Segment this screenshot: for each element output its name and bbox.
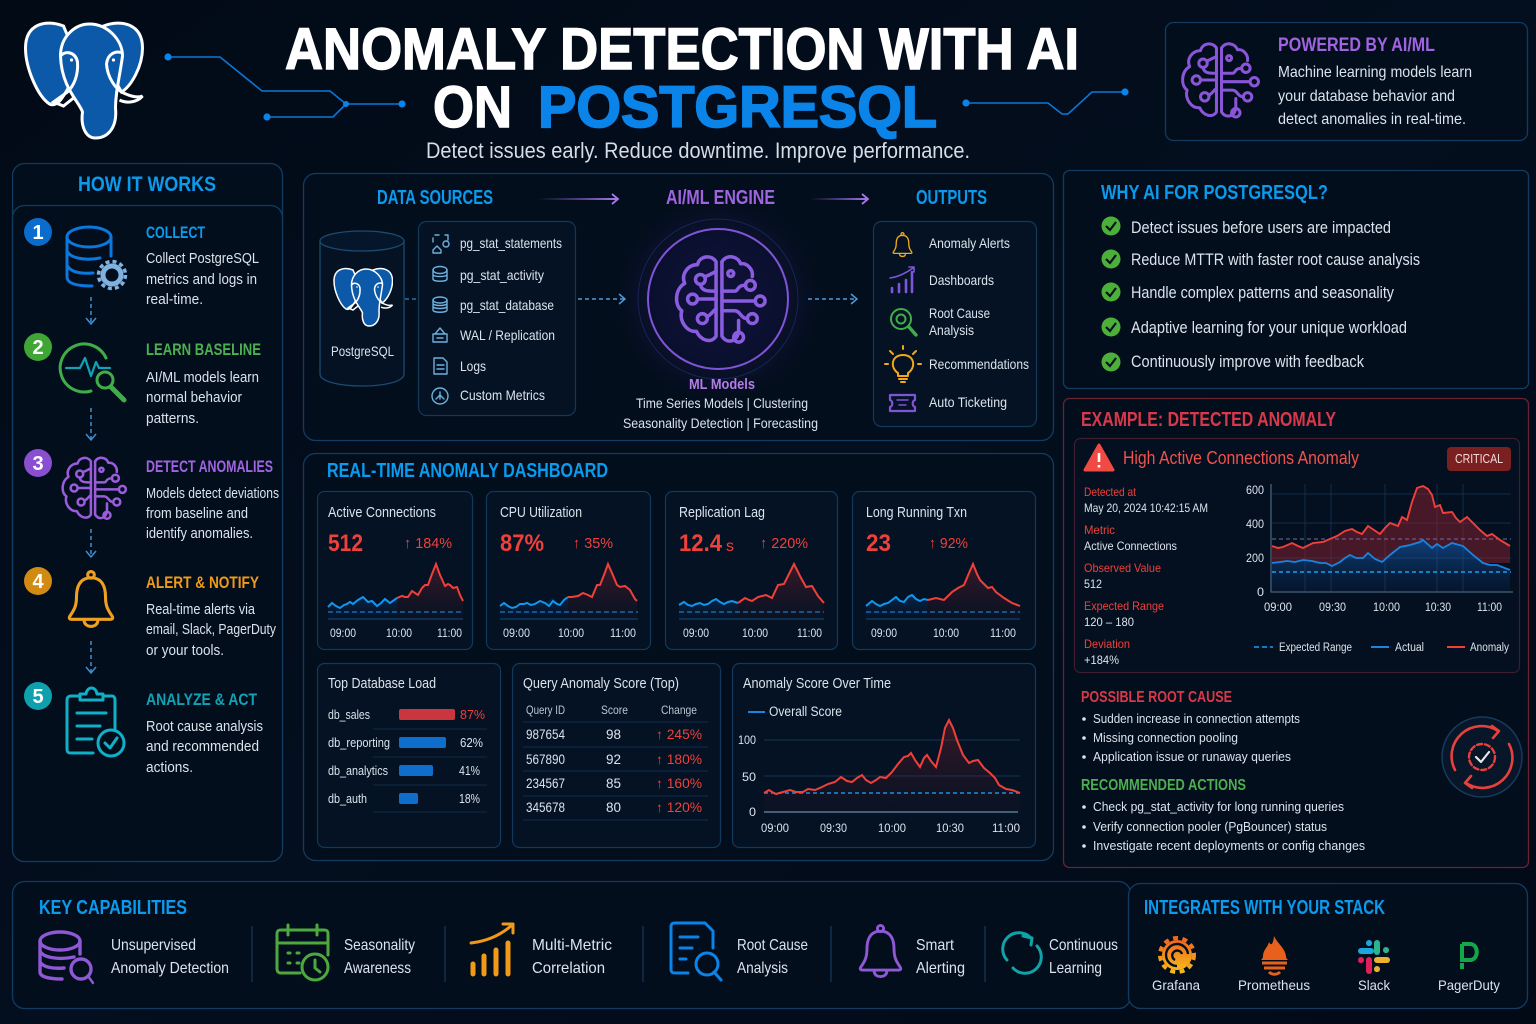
heading: dashboard: REAL-TIME ANOMALY DASHBOARD xyxy=(327,460,608,482)
outputs list: Recommendations xyxy=(929,356,1029,372)
title: ON xyxy=(433,75,512,140)
heading: integrations: INTEGRATES WITH YOUR STACK xyxy=(1144,897,1385,919)
recommended actions: Verify connection pooler (PgBouncer) status xyxy=(1093,820,1327,834)
step 2: learn baseline: LEARN BASELINE xyxy=(146,340,261,359)
step 2: learn baseline: AI/ML models learn xyxy=(146,369,259,386)
chart legend: Anomaly xyxy=(1470,642,1509,654)
card: replication lag xyxy=(666,492,838,650)
icon: brain xyxy=(1183,44,1258,117)
capability: unsupervised: Anomaly Detection xyxy=(111,960,229,977)
card: replication lag: 11:00 xyxy=(797,626,822,640)
panel: integrations xyxy=(1128,884,1528,1008)
chart legend xyxy=(1254,642,1509,654)
card: long running txn: ↑ 92% xyxy=(929,535,968,552)
card: query anomaly score table: ↑ 120% xyxy=(656,800,702,815)
card: query anomaly score table: 345678 xyxy=(526,800,565,815)
panel: how it works xyxy=(12,164,282,862)
anomaly name: High Active Connections Anomaly xyxy=(1123,448,1359,468)
capability: smart alerting: Smart xyxy=(916,937,954,954)
card: query anomaly score table: ↑ 245% xyxy=(656,727,702,742)
card: long running txn xyxy=(852,492,1036,650)
possible root cause: Missing connection pooling xyxy=(1093,731,1238,745)
logo: PostgreSQL elephant xyxy=(26,23,142,138)
step 3: detect anomalies xyxy=(24,449,279,542)
card: top database load: Top Database Load xyxy=(328,675,436,692)
ML models text: ML Models xyxy=(689,376,755,393)
recommended actions xyxy=(1081,777,1365,853)
heading: AI/ML engine: AI/ML ENGINE xyxy=(666,187,775,209)
card: anomaly score over time: 11:00 xyxy=(992,821,1020,835)
card: top database load: 87% xyxy=(460,707,485,722)
card: query anomaly score table: 987654 xyxy=(526,727,565,742)
step 4: alert and notify xyxy=(24,567,276,659)
step 3: detect anomalies: from baseline and xyxy=(146,505,248,522)
powered description xyxy=(1278,64,1472,128)
card: anomaly score over time: 10:00 xyxy=(878,821,906,835)
card: query anomaly score table: Query Anomaly Score (Top) xyxy=(523,675,679,692)
capability: root cause: Root Cause xyxy=(737,937,808,954)
anomaly details: Detected at xyxy=(1084,485,1137,499)
subtitle: Detect issues early. Reduce downtime. Improve performance. xyxy=(426,138,970,163)
card: replication lag: Replication Lag xyxy=(679,504,765,521)
card: long running txn: 09:00 xyxy=(871,626,897,640)
anomaly details: Observed Value xyxy=(1084,561,1161,575)
recommended actions: RECOMMENDED ACTIONS xyxy=(1081,777,1246,794)
card: active connections: ↑ 184% xyxy=(404,535,452,552)
chart: connections: 0 xyxy=(1257,585,1264,599)
ML models text: Seasonality Detection | Forecasting xyxy=(623,415,818,431)
panel: example detected anomaly xyxy=(1064,398,1528,868)
card: top database load xyxy=(318,664,500,848)
chart: connections: 09:30 xyxy=(1319,600,1346,614)
card: query anomaly score table: Change xyxy=(661,703,697,717)
title: ANOMALY DETECTION WITH AI xyxy=(285,17,1079,82)
card: anomaly score over time: Anomaly Score Over Time xyxy=(743,675,891,692)
card: active connections: 11:00 xyxy=(437,626,462,640)
capability: multi-metric: Correlation xyxy=(532,960,605,977)
step 1: collect: real-time. xyxy=(146,291,203,308)
step 1: collect: 1 xyxy=(32,222,44,244)
card: top database load: 62% xyxy=(460,735,483,750)
data sources list: Custom Metrics xyxy=(460,387,545,403)
capability: root cause: Analysis xyxy=(737,960,788,977)
card: CPU utilization: 11:00 xyxy=(610,626,636,640)
arrow: step 2 to 3 xyxy=(86,408,96,440)
capability: continuous learning xyxy=(1003,933,1118,977)
card: query anomaly score table: 567890 xyxy=(526,752,565,767)
possible root cause: POSSIBLE ROOT CAUSE xyxy=(1081,689,1232,706)
anomaly details: Expected Range xyxy=(1084,599,1164,613)
card: active connections: 09:00 xyxy=(330,626,356,640)
arrow: step 4 to 5 xyxy=(86,641,96,673)
step 2: learn baseline: patterns. xyxy=(146,410,199,427)
panel: key capabilities xyxy=(12,882,1130,1008)
powered description: detect anomalies in real-time. xyxy=(1278,111,1466,128)
card: replication lag: 09:00 xyxy=(683,626,709,640)
step 4: alert and notify: Real-time alerts via xyxy=(146,601,256,618)
chart: connections: 10:30 xyxy=(1425,600,1451,614)
list: benefits: Continuously improve with feedback xyxy=(1131,352,1364,371)
step 4: alert and notify: ALERT & NOTIFY xyxy=(146,573,260,592)
anomaly details: Active Connections xyxy=(1084,539,1177,553)
card: replication lag: 10:00 xyxy=(742,626,768,640)
anomaly details xyxy=(1084,485,1208,667)
list: benefits: Adaptive learning for your unique workload xyxy=(1131,318,1407,337)
capability: seasonality xyxy=(277,925,415,980)
card: replication lag: 12.4 xyxy=(679,530,723,557)
arrow: sources to engine xyxy=(578,294,625,304)
card: CPU utilization: 09:00 xyxy=(503,626,530,640)
card: query anomaly score table: Query ID xyxy=(526,703,565,717)
heading: data sources: DATA SOURCES xyxy=(377,187,493,209)
step 3: detect anomalies: DETECT ANOMALIES xyxy=(146,457,273,476)
chart: connections: 10:00 xyxy=(1373,600,1400,614)
title xyxy=(285,17,1079,140)
connector: cylinder to sources xyxy=(405,298,418,300)
card: replication lag: s xyxy=(726,538,734,555)
PostgreSQL cylinder: PostgreSQL xyxy=(331,343,394,359)
capability: seasonality: Awareness xyxy=(344,960,411,977)
capability: multi-metric xyxy=(471,924,612,977)
logo: grafana: Grafana xyxy=(1152,977,1200,993)
powered description: Machine learning models learn xyxy=(1278,64,1472,81)
step 5: analyze and act: ANALYZE & ACT xyxy=(146,690,258,709)
data sources list: Logs xyxy=(460,358,486,374)
arrow: step 3 to 4 xyxy=(86,529,96,557)
badge: critical xyxy=(1447,447,1511,471)
heading: how it works: HOW IT WORKS xyxy=(78,173,216,196)
step 1: collect: Collect PostgreSQL xyxy=(146,250,259,267)
step 4: alert and notify: or your tools. xyxy=(146,642,224,659)
step 5: analyze and act: 5 xyxy=(32,686,44,708)
data sources list: pg_stat_database xyxy=(460,297,554,313)
card: anomaly score over time: Overall Score xyxy=(769,704,842,719)
card: anomaly score over time: 100 xyxy=(738,733,756,747)
step 2: learn baseline: 2 xyxy=(32,337,44,359)
arrow: step 1 to 2 xyxy=(86,297,96,324)
anomaly details: +184% xyxy=(1084,653,1119,667)
card: long running txn: Long Running Txn xyxy=(866,504,967,521)
powered heading: POWERED BY AI/ML xyxy=(1278,35,1435,56)
step 2: learn baseline: normal behavior xyxy=(146,389,242,406)
capability: seasonality: Seasonality xyxy=(344,937,415,954)
panel: real-time dashboard xyxy=(304,454,1054,860)
card: query anomaly score table xyxy=(512,664,720,848)
data sources list: WAL / Replication xyxy=(460,327,555,343)
icon: remediation cycle xyxy=(1442,717,1522,797)
logo: pagerduty: PagerDuty xyxy=(1438,977,1500,993)
card: top database load: 41% xyxy=(459,763,480,778)
card: anomaly score over time: 50 xyxy=(742,770,756,784)
outputs list: Dashboards xyxy=(929,272,994,288)
card: long running txn: 10:00 xyxy=(933,626,959,640)
card: active connections: 10:00 xyxy=(386,626,412,640)
arrow: to engine xyxy=(538,194,618,204)
arrow: to outputs xyxy=(810,194,868,204)
card: top database load: db_analytics xyxy=(328,763,388,778)
card: query anomaly score table: 234567 xyxy=(526,776,565,791)
list: benefits xyxy=(1102,216,1420,372)
anomaly card xyxy=(1074,438,1520,672)
card: query anomaly score table: Score xyxy=(601,703,628,717)
step 2: learn baseline xyxy=(24,333,261,427)
step 3: detect anomalies: identify anomalies. xyxy=(146,525,253,542)
card: query anomaly score table: 92 xyxy=(606,752,621,767)
circuit decoration left xyxy=(164,53,406,121)
AI engine brain xyxy=(618,199,818,399)
logo: prometheus xyxy=(1238,936,1310,993)
card: CPU utilization: ↑ 35% xyxy=(573,535,613,552)
card: active connections: Active Connections xyxy=(328,504,436,521)
logo: pagerduty xyxy=(1438,944,1500,993)
step 5: analyze and act: and recommended xyxy=(146,738,259,755)
badge: critical: CRITICAL xyxy=(1455,451,1503,466)
card: anomaly score over time xyxy=(732,664,1036,848)
card: query anomaly score table: 98 xyxy=(606,727,621,742)
panel: powered by AI/ML xyxy=(1166,22,1528,140)
chart: connections: 11:00 xyxy=(1477,600,1502,614)
data sources list: pg_stat_activity xyxy=(460,267,544,283)
outputs list xyxy=(874,222,1036,426)
card: CPU utilization: 87% xyxy=(500,530,544,557)
heading: example: EXAMPLE: DETECTED ANOMALY xyxy=(1081,409,1337,431)
outputs list: Anomaly Alerts xyxy=(929,235,1010,251)
capability: root cause xyxy=(671,923,808,980)
capability: smart alerting xyxy=(860,925,965,977)
heading: key capabilities: KEY CAPABILITIES xyxy=(39,897,187,919)
step 5: analyze and act xyxy=(24,682,263,776)
ML models text: Time Series Models | Clustering xyxy=(636,395,808,411)
card: query anomaly score table: ↑ 160% xyxy=(656,776,702,791)
capability: unsupervised: Unsupervised xyxy=(111,937,196,954)
anomaly details: Metric xyxy=(1084,523,1115,537)
card: anomaly score over time: 09:30 xyxy=(820,821,847,835)
powered description: your database behavior and xyxy=(1278,88,1455,105)
recommended actions: Check pg_stat_activity for long running queries xyxy=(1093,800,1344,814)
card: top database load: db_sales xyxy=(328,707,370,722)
card: replication lag: ↑ 220% xyxy=(760,535,808,552)
step 4: alert and notify: 4 xyxy=(32,571,44,593)
anomaly details: May 20, 2024 10:42:15 AM xyxy=(1084,501,1208,515)
list: benefits: Handle complex patterns and seasonality xyxy=(1131,283,1394,302)
anomaly details: 120 – 180 xyxy=(1084,615,1134,629)
chart: connections: 400 xyxy=(1246,517,1264,531)
circuit decoration right xyxy=(962,88,1129,114)
logo: grafana xyxy=(1152,938,1200,993)
heading: why AI: WHY AI FOR POSTGRESQL? xyxy=(1101,182,1328,204)
capability: unsupervised xyxy=(40,932,229,983)
outputs list: Auto Ticketing xyxy=(929,394,1007,410)
step 1: collect: COLLECT xyxy=(146,223,205,242)
anomaly details: 512 xyxy=(1084,577,1102,591)
card: query anomaly score table: 85 xyxy=(606,776,621,791)
capability: smart alerting: Alerting xyxy=(916,960,965,977)
possible root cause: Application issue or runaway queries xyxy=(1093,750,1291,764)
card: long running txn: 11:00 xyxy=(990,626,1016,640)
card: active connections: 512 xyxy=(328,530,363,557)
card: CPU utilization xyxy=(486,492,650,650)
card: top database load: 18% xyxy=(459,791,480,806)
possible root cause: Sudden increase in connection attempts xyxy=(1093,712,1300,726)
chart: connections: 200 xyxy=(1246,551,1264,565)
card: anomaly score over time: 10:30 xyxy=(936,821,964,835)
card: top database load: db_auth xyxy=(328,791,367,806)
chart legend: Expected Range xyxy=(1279,642,1352,654)
capability: continuous learning: Continuous xyxy=(1049,937,1118,954)
card: active connections xyxy=(318,492,472,650)
logo: slack xyxy=(1358,943,1391,993)
panel: why AI for PostgreSQL xyxy=(1064,170,1528,388)
chart: connections xyxy=(1246,483,1513,614)
card: query anomaly score table: ↑ 180% xyxy=(656,752,702,767)
step 4: alert and notify: email, Slack, PagerDuty xyxy=(146,621,276,638)
step 1: collect: metrics and logs in xyxy=(146,271,257,288)
icon: warning xyxy=(1085,445,1113,470)
data sources list: pg_stat_statements xyxy=(460,235,562,251)
card: top database load: db_reporting xyxy=(328,735,390,750)
chart: connections: 600 xyxy=(1246,483,1264,497)
panel: pipeline xyxy=(304,174,1054,440)
capability: multi-metric: Multi-Metric xyxy=(532,937,612,954)
list: benefits: Detect issues before users are impacted xyxy=(1131,218,1391,237)
arrow: engine to outputs xyxy=(808,294,857,304)
capability: continuous learning: Learning xyxy=(1049,960,1102,977)
outputs list: Root Cause xyxy=(929,305,990,321)
card: CPU utilization: 10:00 xyxy=(558,626,584,640)
anomaly details: Deviation xyxy=(1084,637,1130,651)
chart legend: Actual xyxy=(1395,642,1424,654)
title: POSTGRESQL xyxy=(538,75,937,140)
step 3: detect anomalies: Models detect deviations xyxy=(146,485,279,502)
step 3: detect anomalies: 3 xyxy=(32,453,44,475)
PostgreSQL cylinder xyxy=(320,231,404,386)
step 5: analyze and act: actions. xyxy=(146,759,193,776)
chart: connections: 09:00 xyxy=(1264,600,1292,614)
list: benefits: Reduce MTTR with faster root cause analysis xyxy=(1131,250,1420,269)
card: CPU utilization: CPU Utilization xyxy=(500,504,582,521)
possible root cause xyxy=(1081,689,1300,764)
card: anomaly score over time: 09:00 xyxy=(761,821,789,835)
card: anomaly score over time: 0 xyxy=(749,805,756,819)
heading: outputs: OUTPUTS xyxy=(916,187,987,209)
outputs list: Analysis xyxy=(929,322,974,338)
ML models text xyxy=(623,376,818,431)
recommended actions: Investigate recent deployments or config changes xyxy=(1093,839,1365,853)
step 1: collect xyxy=(24,218,259,308)
logo: slack: Slack xyxy=(1358,977,1391,993)
card: long running txn: 23 xyxy=(866,530,891,557)
step 5: analyze and act: Root cause analysis xyxy=(146,718,263,735)
logo: prometheus: Prometheus xyxy=(1238,977,1310,993)
card: query anomaly score table: 80 xyxy=(606,800,621,815)
data sources list xyxy=(418,222,576,416)
